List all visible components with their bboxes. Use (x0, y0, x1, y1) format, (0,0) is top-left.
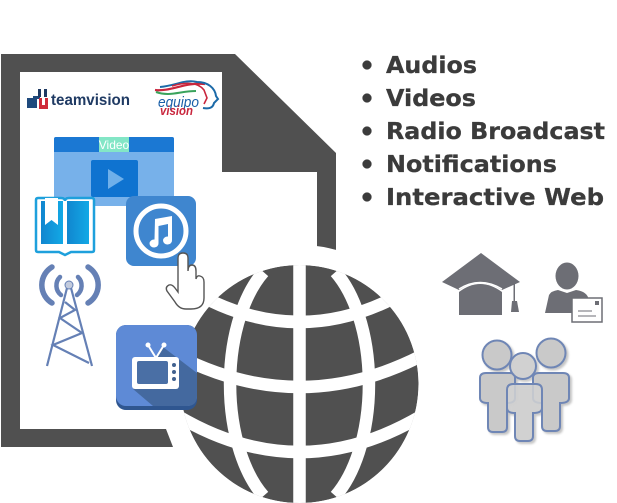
document outline with folded corner (1, 54, 336, 447)
left person (480, 340, 515, 432)
icon: television tile (116, 325, 197, 410)
logo: equipo vision (155, 81, 218, 118)
icon: pointing hand (166, 253, 204, 309)
icon: music note tile (126, 196, 196, 266)
icon: graduation cap (442, 253, 520, 315)
center person (507, 353, 542, 441)
logo: equipo vision: vision (160, 103, 193, 118)
bullet list of media types (362, 51, 605, 211)
icon: book (36, 198, 94, 255)
logo: teamvision (27, 89, 130, 109)
icon: radio tower (42, 267, 98, 366)
icon: video window: Video (99, 138, 130, 152)
icon: group of three people (480, 338, 569, 441)
bullet list of media types: Radio Broadcast (386, 117, 605, 145)
bullet list of media types: Notifications (386, 150, 557, 178)
bullet list of media types: Interactive Web (386, 183, 604, 211)
icon: person with envelope (545, 262, 602, 322)
globe (184, 246, 418, 503)
logo: teamvision: teamvision (51, 92, 130, 109)
logo: equipo vision: equipo (158, 94, 199, 111)
bullet list of media types: Videos (386, 84, 476, 112)
icon: video window (54, 137, 174, 206)
bullet list of media types: Audios (386, 51, 477, 79)
right person (533, 338, 569, 431)
